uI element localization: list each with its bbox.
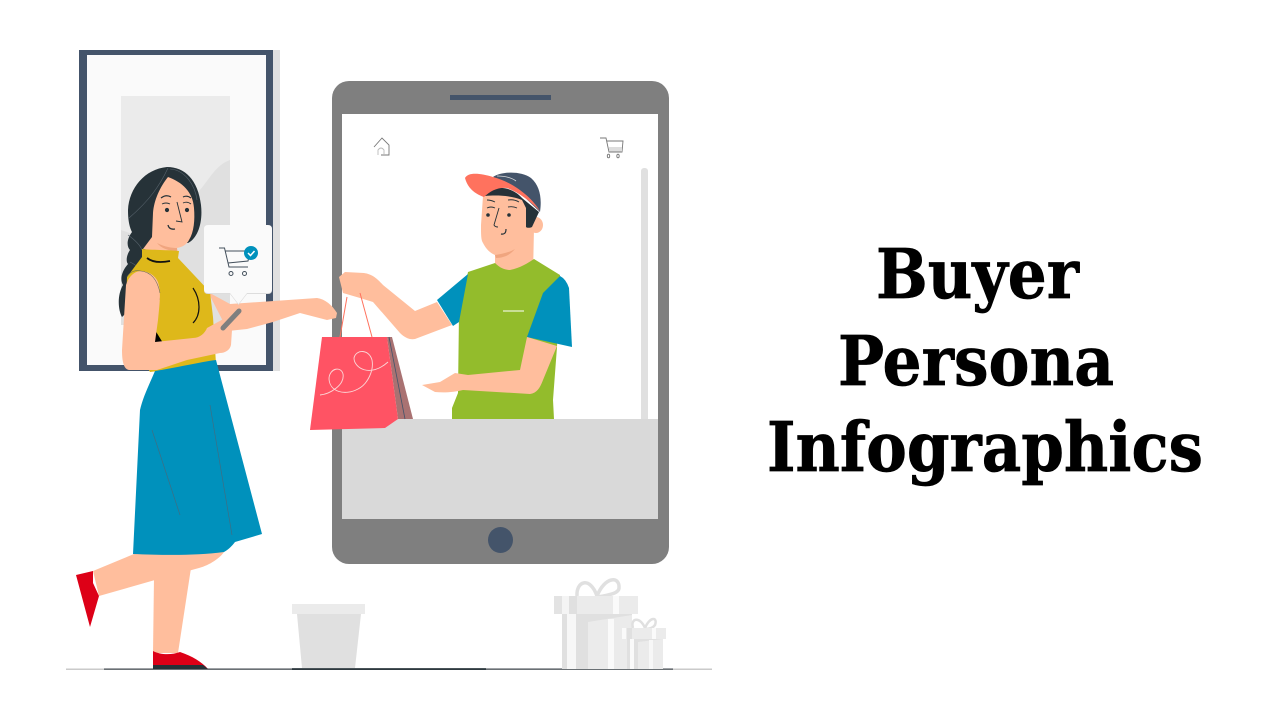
ear (529, 217, 543, 233)
speaker (450, 95, 551, 100)
title: Infographics (767, 408, 1203, 488)
scrollbar (641, 168, 648, 428)
arm hole (149, 297, 163, 343)
yellow top (125, 257, 216, 372)
green shirt (452, 259, 560, 419)
icon: cart with check (219, 246, 258, 276)
back leg (93, 552, 224, 596)
icon: home (374, 138, 389, 155)
wall frame (79, 50, 280, 371)
right sleeve (527, 276, 572, 347)
cap (493, 173, 541, 212)
woman (76, 167, 337, 669)
front leg (153, 568, 191, 653)
counter (342, 419, 658, 519)
ground line (66, 668, 712, 670)
chin shadow (157, 243, 177, 251)
hair (485, 188, 539, 228)
neck and face (143, 177, 194, 252)
right forearm (422, 337, 557, 394)
bucket (292, 604, 365, 668)
face details (486, 200, 519, 234)
face and neck (481, 190, 534, 275)
raised shoe (76, 571, 99, 627)
phone (223, 311, 239, 328)
icon: cart (600, 138, 623, 158)
cart speech bubble (204, 225, 272, 305)
front shoe (153, 651, 208, 669)
chin shadow (495, 249, 515, 258)
large gift (554, 580, 638, 669)
title: Buyer (876, 235, 1080, 315)
title: Persona (838, 322, 1114, 402)
tablet (332, 81, 669, 564)
left arm holding bag (339, 272, 452, 339)
small gift (618, 619, 666, 669)
near arm (122, 271, 232, 370)
shopping bag (310, 293, 413, 430)
home button (488, 527, 513, 553)
tablet screen (342, 114, 658, 519)
far arm (208, 292, 337, 331)
title (767, 235, 1203, 488)
left sleeve (437, 274, 468, 326)
hair (119, 167, 201, 317)
shopkeeper (339, 173, 572, 419)
face details (161, 196, 191, 229)
skirt (133, 360, 262, 555)
